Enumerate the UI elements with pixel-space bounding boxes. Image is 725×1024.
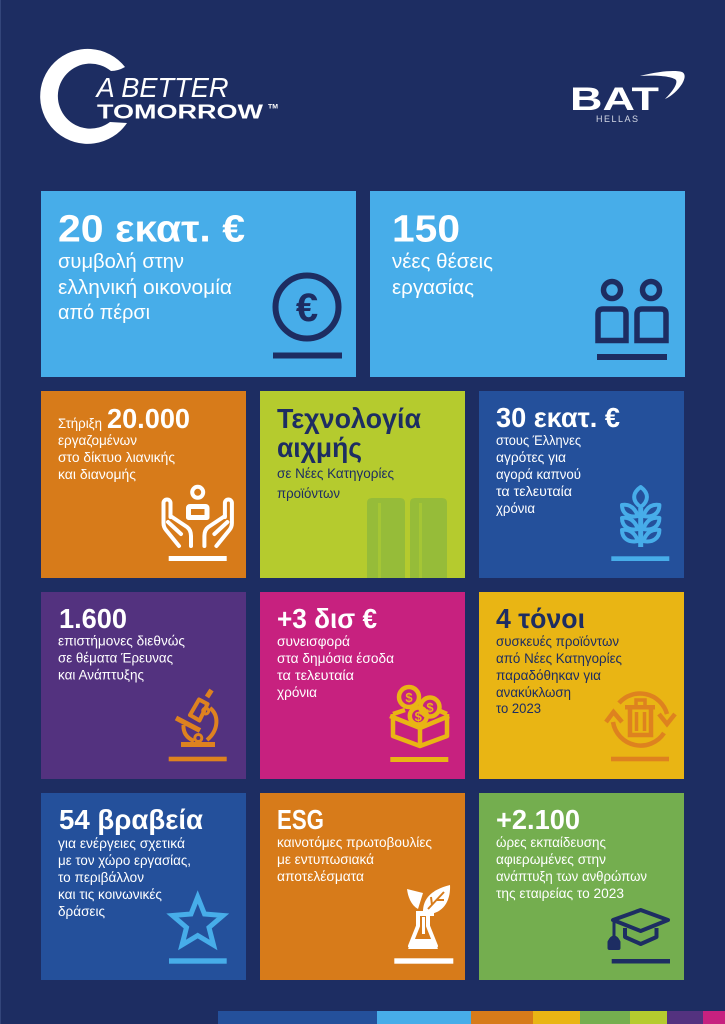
text: recycling: από Νέες Κατηγορίες — [496, 650, 622, 666]
text: scientists: επιστήμονες διεθνώς — [58, 632, 185, 648]
logo: BAT Hellas: BAT — [570, 81, 660, 117]
panel: 4 tons — [479, 592, 684, 779]
image: devices ghost — [367, 498, 447, 578]
heading: 150: 150 — [392, 208, 460, 250]
heading: Τεχνολογία αιχμής: Τεχνολογία — [277, 403, 421, 434]
text: employees: και διανομής — [58, 466, 136, 482]
panel: 54 awards — [41, 793, 246, 980]
panel: technology — [260, 391, 465, 578]
panel: 2.100 hours — [479, 793, 684, 980]
text: contribution — [58, 251, 232, 324]
icon: leaf and flask — [394, 885, 453, 964]
text: public revenue — [277, 633, 394, 700]
text: employees: στο δίκτυο λιανικής — [58, 449, 175, 465]
heading: 1.600: 1.600 — [59, 603, 127, 634]
text: farmers: αγρότες για — [496, 449, 566, 465]
text: farmers: στους Έλληνες — [496, 432, 581, 448]
text: scientists — [58, 632, 185, 682]
text: awards: με τον χώρο εργασίας, — [58, 852, 191, 868]
text: farmers: αγορά καπνού — [496, 466, 581, 482]
icon: star — [169, 897, 227, 964]
panel: 20.000 employees — [41, 391, 246, 578]
text: initiatives — [277, 834, 432, 884]
heading: 20 εκατ. €: 20 εκατ. € — [58, 208, 245, 250]
icon: euro coin: € — [296, 286, 318, 330]
panel: ESG — [260, 793, 465, 980]
text: public revenue: τα τελευταία — [277, 667, 354, 683]
text: new categories: σε Νέες Κατηγορίες — [277, 465, 394, 481]
logo: A Better Tomorrow: A BETTER — [95, 72, 228, 103]
heading: ESG: ESG — [277, 804, 324, 835]
text: awards — [58, 835, 191, 919]
text: awards: το περιβάλλον — [58, 869, 144, 885]
text: employees: εργαζομένων — [58, 432, 137, 448]
text: new categories — [277, 465, 394, 501]
text: public revenue: στα δημόσια έσοδα — [277, 650, 394, 666]
text: public revenue: συνεισφορά — [277, 633, 350, 649]
heading: Στήριξη 20.000: Στήριξη — [58, 415, 102, 431]
icon: box of coins: $ — [405, 690, 413, 705]
text: new jobs: νέες θέσεις — [392, 251, 493, 273]
text: recycling: ανακύκλωση — [496, 684, 571, 700]
text: training hours: της εταιρείας το 2023 — [496, 885, 624, 901]
text: employees — [58, 432, 175, 482]
heading: Στήριξη 20.000 — [58, 403, 190, 434]
heading: Τεχνολογία αιχμής — [277, 403, 421, 463]
panel: 30 million euro — [479, 391, 684, 578]
text: training hours: ώρες εκπαίδευσης — [496, 834, 606, 850]
heading: Στήριξη 20.000: 20.000 — [107, 403, 190, 434]
bottom colour strip — [218, 1011, 725, 1024]
text: recycling: το 2023 — [496, 700, 541, 716]
logo: A Better Tomorrow — [40, 49, 278, 144]
heading: Τεχνολογία αιχμής: αιχμής — [277, 432, 362, 463]
text: new jobs — [392, 251, 493, 299]
icon: box of coins: $ — [426, 700, 434, 715]
text: contribution: ελληνική οικονομία — [58, 277, 232, 299]
heading: 4 τόνοι: 4 τόνοι — [496, 603, 585, 634]
text: recycling: παραδόθηκαν για — [496, 667, 601, 683]
text: training hours: αφιερωμένες στην — [496, 851, 606, 867]
logo: A Better Tomorrow: TOMORROW — [97, 102, 263, 124]
text: initiatives: καινοτόμες πρωτοβουλίες — [277, 834, 432, 850]
icon: euro coin — [273, 276, 342, 358]
panel: 150 new jobs — [370, 191, 685, 377]
icon: two people — [597, 282, 667, 360]
icon: recycling bin — [606, 693, 675, 761]
icon: wheat — [611, 487, 669, 561]
icon: box of coins: $ — [415, 709, 423, 724]
heading: 54 βραβεία: 54 βραβεία — [59, 804, 203, 835]
heading: 30 εκατ. €: 30 εκατ. € — [496, 402, 620, 433]
panel: 20 million euro — [41, 191, 356, 377]
text: training hours: ανάπτυξη των ανθρώπων — [496, 868, 647, 884]
text: initiatives: αποτελέσματα — [277, 868, 364, 884]
panel: 1.600 scientists — [41, 592, 246, 779]
logo: BAT Hellas: HELLAS — [596, 114, 638, 124]
text: farmers: χρόνια — [496, 500, 535, 516]
heading: +2.100: +2.100 — [496, 804, 580, 835]
text: awards: και τις κοινωνικές — [58, 886, 162, 902]
text: initiatives: με εντυπωσιακά — [277, 851, 374, 867]
panel: +3 billion euro — [260, 592, 465, 779]
icon: box of coins — [390, 687, 449, 762]
icon: microscope — [169, 690, 227, 761]
text: recycling — [496, 633, 622, 716]
heading: +3 δισ €: +3 δισ € — [277, 603, 377, 634]
text: contribution: συμβολή στην — [58, 251, 184, 273]
logo: BAT Hellas — [570, 71, 685, 124]
text: training hours — [496, 834, 647, 901]
text: new jobs: εργασίας — [392, 277, 474, 299]
text: scientists: σε θέματα Έρευνας — [58, 650, 173, 666]
logo: A Better Tomorrow: TM — [268, 104, 278, 110]
text: new categories: προϊόντων — [277, 485, 340, 501]
icon: hands holding person — [164, 487, 232, 561]
text: public revenue: χρόνια — [277, 684, 317, 700]
text: scientists: και Ανάπτυξης — [58, 666, 144, 682]
text: awards: δράσεις — [58, 903, 105, 919]
text: farmers — [496, 432, 581, 516]
icon: graduation cap — [610, 910, 670, 964]
text: awards: για ενέργειες σχετικά — [58, 835, 185, 851]
text: recycling: συσκευές προϊόντων — [496, 633, 619, 649]
text: farmers: τα τελευταία — [496, 483, 572, 499]
text: contribution: από πέρσι — [58, 302, 150, 324]
